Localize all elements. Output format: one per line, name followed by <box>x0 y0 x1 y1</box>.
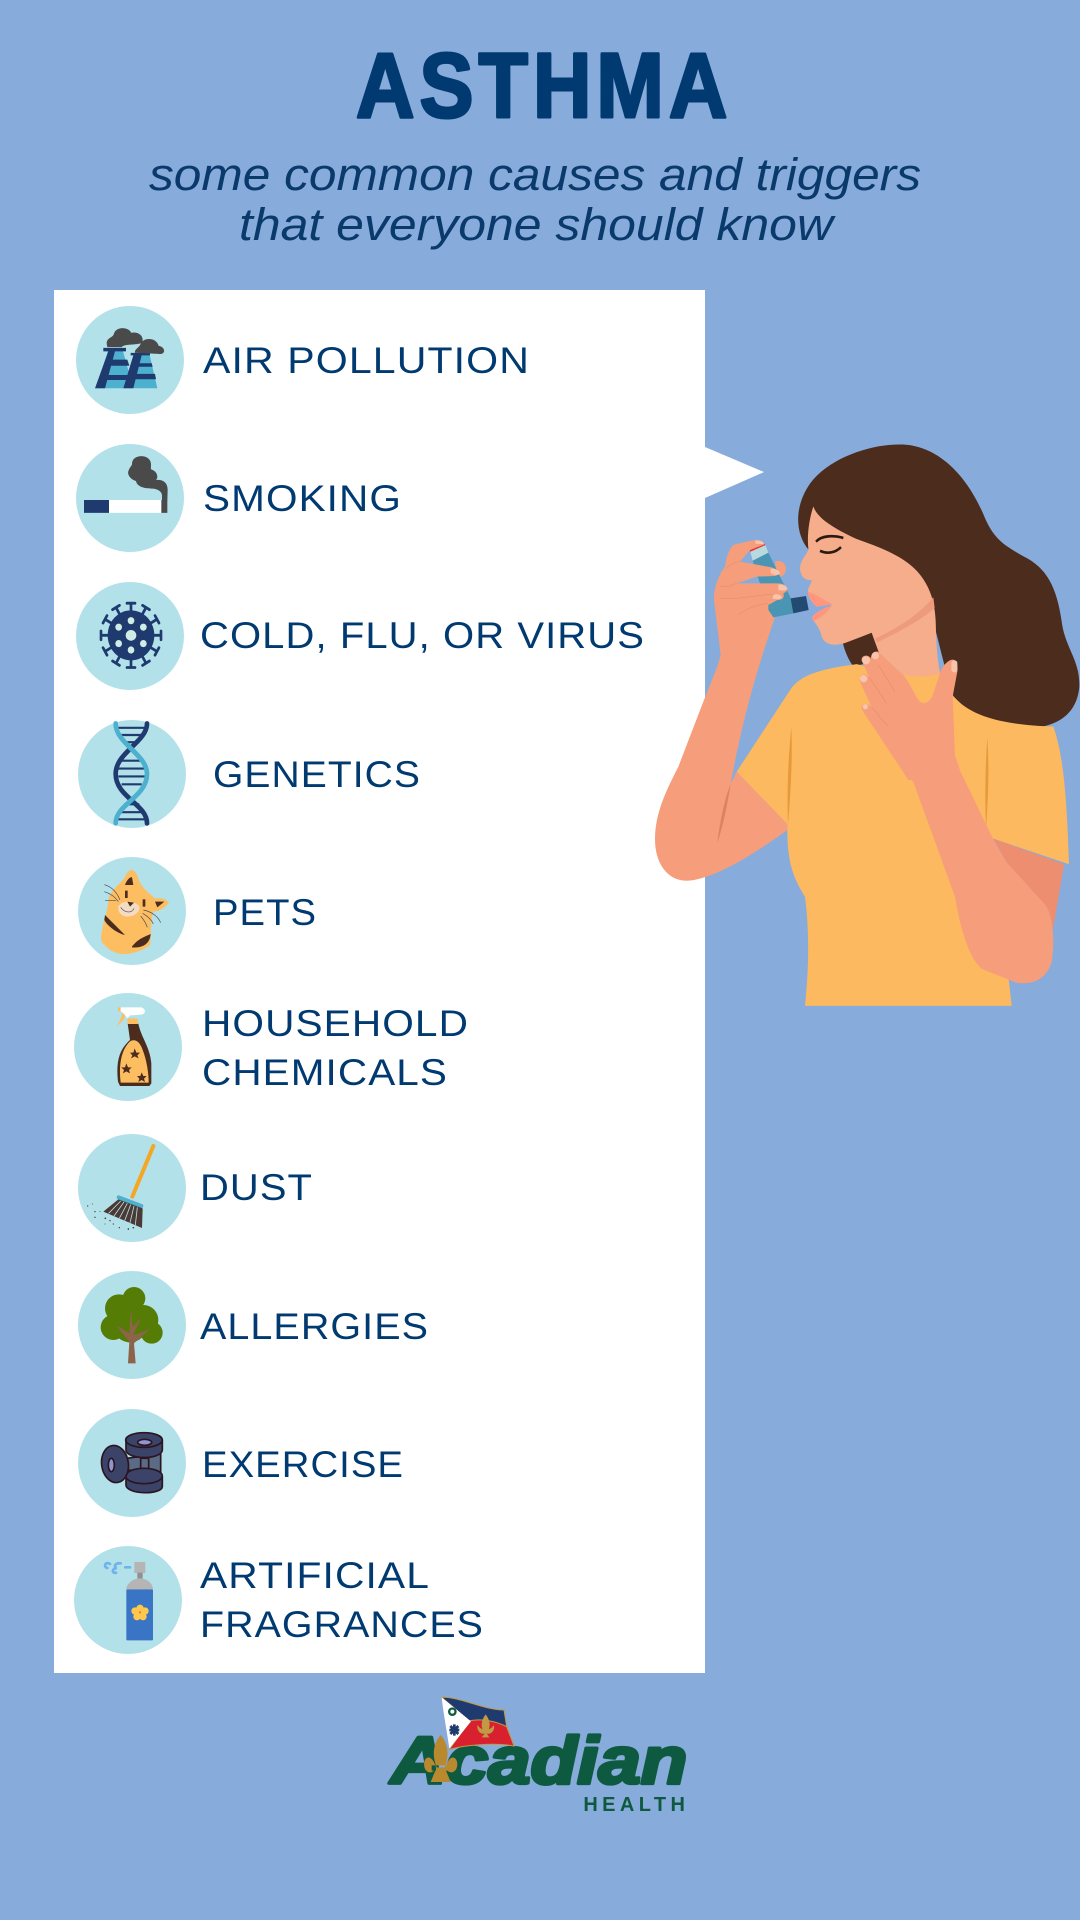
subtitle: that everyone should know <box>239 199 836 250</box>
holding hand <box>713 540 787 680</box>
label: COLD, FLU, OR VIRUS <box>200 615 645 656</box>
sleeve shadow <box>993 839 1064 927</box>
row: household chemicals <box>74 993 469 1101</box>
row: pets <box>78 857 317 965</box>
row: exercise <box>78 1409 404 1517</box>
label: CHEMICALS <box>202 1052 448 1093</box>
icon: virus <box>76 582 184 690</box>
hair <box>798 444 1079 728</box>
label: GENETICS <box>213 754 421 795</box>
label: SMOKING <box>203 478 402 519</box>
label: ARTIFICIAL <box>200 1555 430 1596</box>
flag <box>442 1697 514 1749</box>
jaw shadow <box>875 597 935 642</box>
wordmark: HEALTH <box>583 1794 685 1816</box>
title: ASTHMA <box>356 35 732 137</box>
row: genetics <box>78 720 421 828</box>
inhaler and holding hand <box>713 540 809 680</box>
wordmark: Acadian <box>388 1724 687 1798</box>
icon: factory cooling towers <box>76 306 184 414</box>
speech bubble tail <box>705 447 764 498</box>
label: AIR POLLUTION <box>203 340 530 381</box>
shirt folds <box>788 727 988 828</box>
icon: tree <box>78 1271 186 1379</box>
hand on chest <box>860 652 963 780</box>
row: virus <box>76 582 645 690</box>
lower right arm <box>903 698 1053 983</box>
icon: cat <box>78 857 186 965</box>
panel: trigger list <box>54 290 764 1673</box>
face and neck <box>800 507 942 679</box>
inhaler <box>750 544 809 617</box>
label: FRAGRANCES <box>200 1604 484 1645</box>
fingernails <box>755 540 787 599</box>
subtitle: some common causes and triggers <box>149 149 921 200</box>
mouth <box>808 591 833 621</box>
elbow crease <box>717 784 731 842</box>
raised forearm <box>655 598 787 881</box>
label <box>202 1003 469 1093</box>
icon: perfume spray can <box>74 1546 182 1654</box>
woman using inhaler illustration <box>655 444 1079 1006</box>
label: EXERCISE <box>202 1444 404 1485</box>
subtitle <box>149 149 921 250</box>
icon: broom <box>78 1134 186 1242</box>
eye and brow <box>816 536 843 553</box>
label: PETS <box>213 892 317 933</box>
thumb behind inhaler <box>775 561 786 577</box>
logo: Acadian Health <box>388 1697 687 1816</box>
t-shirt <box>737 664 1069 1006</box>
icon: DNA helix <box>78 720 186 828</box>
row: artificial fragrances <box>74 1546 484 1654</box>
row: air pollution <box>76 306 530 414</box>
body and head <box>655 444 1079 1006</box>
icon: dumbbells <box>78 1409 186 1517</box>
label: HOUSEHOLD <box>202 1003 469 1044</box>
finger lines <box>720 562 775 615</box>
label: DUST <box>200 1167 313 1208</box>
fleur-de-lis <box>424 1735 457 1782</box>
icon: spray bottle <box>74 993 182 1101</box>
label: ALLERGIES <box>200 1306 429 1347</box>
row: allergies <box>78 1271 429 1379</box>
icon: cigarette <box>76 444 184 552</box>
label <box>200 1555 484 1645</box>
row: dust <box>78 1134 313 1242</box>
row: smoking <box>76 444 402 552</box>
